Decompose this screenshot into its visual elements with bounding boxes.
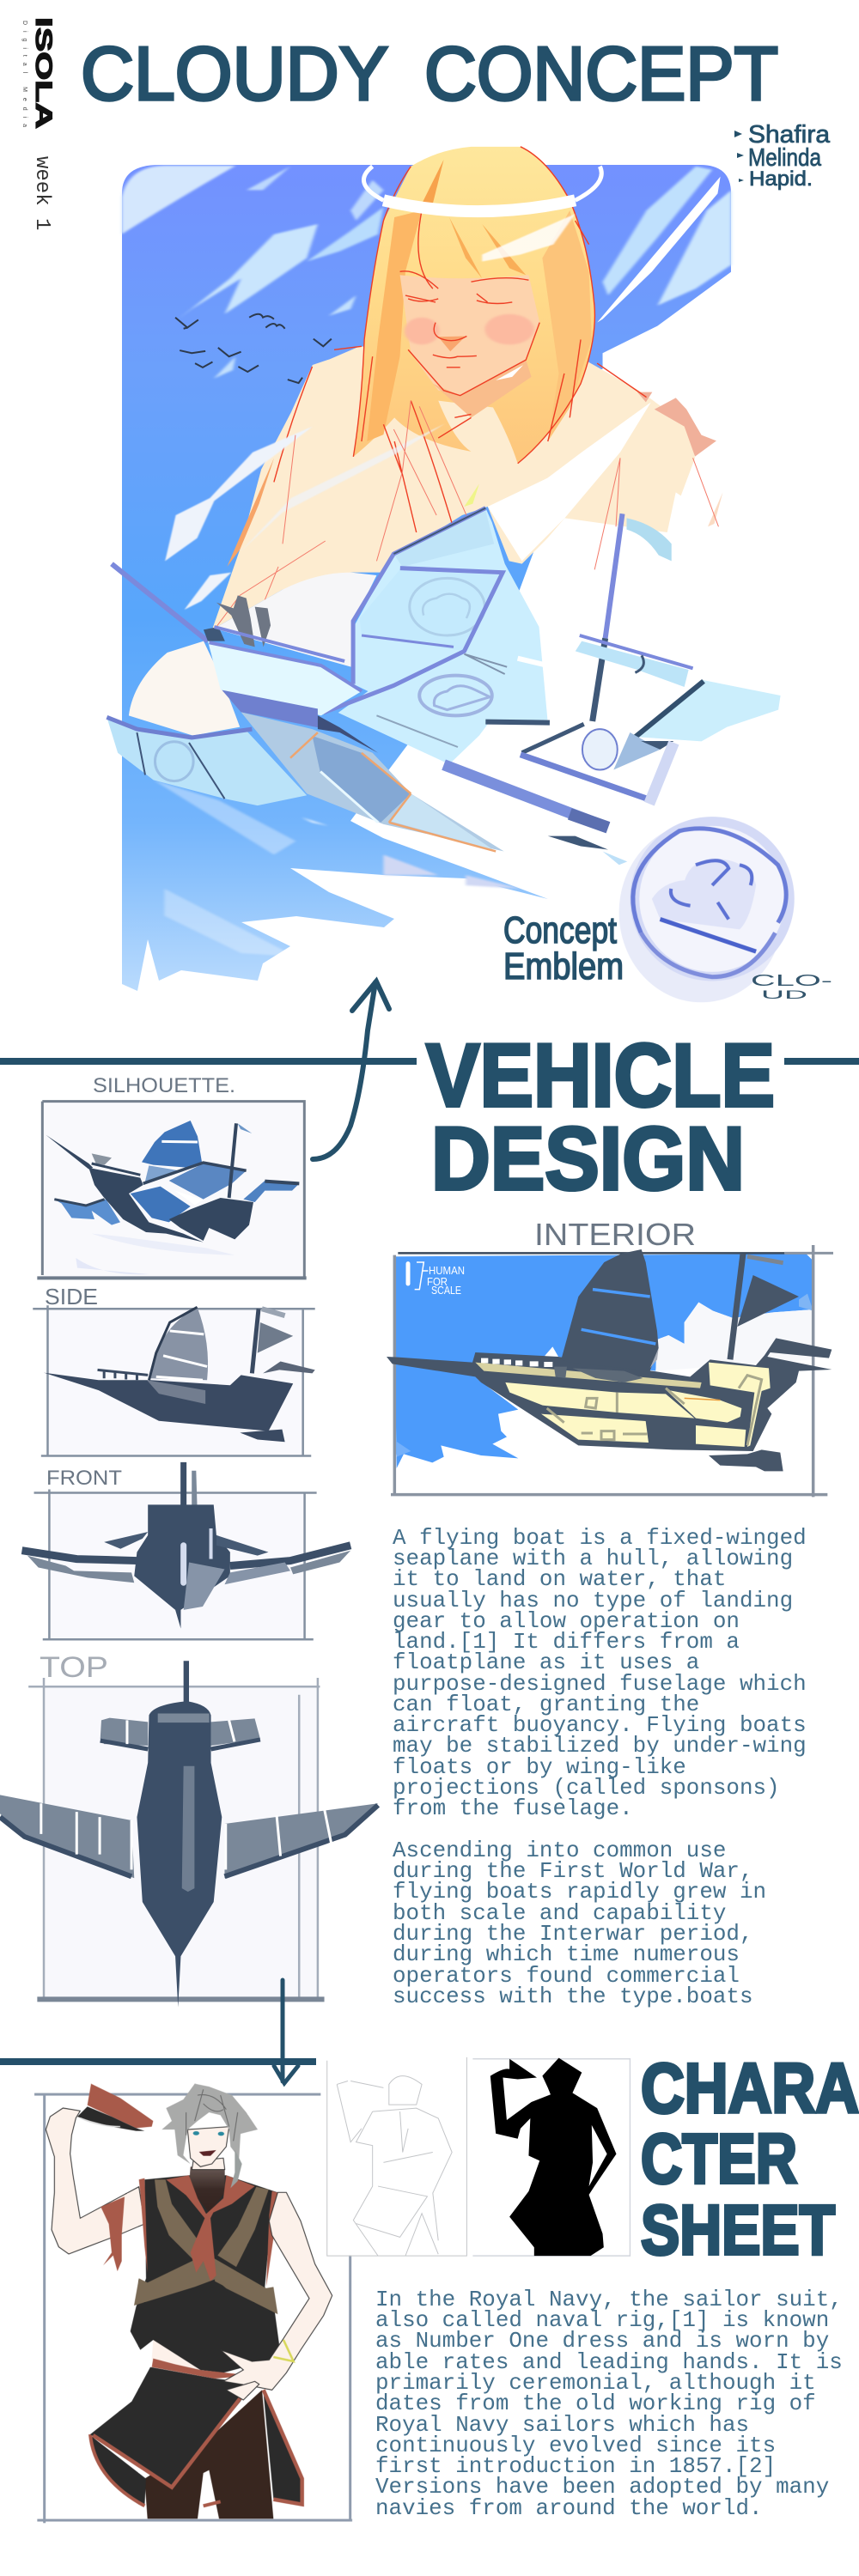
character: hand on hip arm (221, 2192, 332, 2390)
logo: ISOLA Digital Media (21, 17, 57, 129)
illustration: birds (175, 314, 332, 383)
interior: human for scale note: SCALE (431, 1284, 461, 1297)
illustration: sky white streaks (597, 177, 731, 407)
character: cap (88, 2084, 153, 2128)
text block: flying boat description: can float, granting the (393, 1692, 699, 1717)
text block: flying boat description: Ascending into common use (393, 1838, 726, 1863)
label: side: SIDE (45, 1284, 98, 1309)
text block: sailor suit description: In the Royal Navy, the sailor suit, (375, 2287, 843, 2312)
interior: human for scale note: FOR (427, 1275, 448, 1288)
section rule: vehicle design (0, 1058, 859, 1065)
panel: front view (22, 1462, 350, 1639)
girl: hair (353, 147, 594, 464)
panel: interior view (387, 1245, 833, 1497)
heading: vehicle design (426, 1026, 775, 1209)
text block: sailor suit description: dates from the old working rig of (375, 2391, 816, 2416)
white wind streaks (165, 423, 445, 610)
handwritten label: Concept Emblem: Emblem (503, 945, 624, 987)
week label: week 1 (30, 156, 53, 230)
panel: side view (33, 1305, 315, 1455)
panel: silhouette (37, 1102, 307, 1279)
ship: left wing (107, 717, 307, 805)
text block: sailor suit description: as Number One dress and is worn by (375, 2328, 829, 2354)
interior: cream compartments (505, 1382, 694, 1419)
character: neck and scarf (189, 2166, 225, 2213)
character: head (192, 2158, 225, 2170)
panel: character black silhouette (472, 2058, 630, 2256)
team names: Shafira (748, 121, 831, 149)
title: CONCEPT (424, 31, 778, 116)
text block: flying boat description: purpose-designed fuselage which (393, 1671, 807, 1697)
illustration: ocean waves (154, 780, 521, 957)
heading: character sheet: CTER (641, 2120, 797, 2198)
character: right flap (264, 2393, 302, 2505)
rear mast (606, 513, 623, 638)
ship: hull (222, 690, 318, 727)
interior: main sail (561, 1249, 659, 1371)
interior: deck rail (481, 1358, 552, 1367)
interior: human scale figure (408, 1262, 428, 1290)
text block: flying boat description: may be stabilized by under-wing (393, 1733, 807, 1759)
team names: Melinda (748, 144, 822, 172)
text block: flying boat description: operators found commercial (393, 1963, 740, 1989)
text block: flying boat description: during the Interwar period, (393, 1921, 752, 1947)
text block: sailor suit description: navies from around the world. (375, 2495, 763, 2521)
main sail (338, 508, 547, 764)
bowsprit (112, 564, 208, 641)
near-white glow behind ship (212, 573, 376, 667)
logo: ISOLA Digital Media: ISOLA (31, 17, 57, 129)
crew silhouettes (216, 595, 255, 647)
text block: sailor suit description: first introduction in 1857.[2] (375, 2453, 776, 2479)
character: belt (152, 2359, 252, 2379)
text block: flying boat description: gear to allow operation on (393, 1608, 740, 1634)
illustration: sky background (122, 165, 731, 991)
text block: flying boat description: seaplane with a hull, allowing (393, 1546, 793, 1571)
label: silhouette: SILHOUETTE. (93, 1074, 235, 1097)
title: CLOUDY (81, 31, 388, 116)
illustration: concept emblem coin (619, 817, 795, 1002)
text block: flying boat description: projections (called sponsons) (393, 1775, 780, 1801)
girl: face (400, 275, 539, 396)
silhouette: wings (54, 1200, 120, 1225)
logo: ISOLA Digital Media: Digital Media (21, 21, 27, 127)
text block: sailor suit description: able rates and leading hands. It is (375, 2349, 843, 2375)
text block: sailor suit description: Versions have been adopted by many (375, 2474, 829, 2500)
panel: character line sketch (327, 2057, 466, 2256)
text block: flying boat description: it to land on water, that (393, 1566, 726, 1592)
label: interior: INTERIOR (534, 1217, 696, 1252)
text block: flying boat description: aircraft buoyancy. Flying boats (393, 1712, 807, 1738)
arrow: vehicle to character (274, 1980, 298, 2083)
handwritten label: Concept Emblem: Concept (503, 909, 617, 951)
team names (734, 121, 831, 191)
text block: flying boat description: floatplane as it uses a (393, 1649, 699, 1675)
illustration: ship lower hull (107, 690, 673, 865)
interior: sky (393, 1254, 813, 1468)
small sail (576, 641, 689, 687)
character: torso (131, 2175, 279, 2372)
handwritten label: CLOUD: UD (761, 987, 807, 1001)
text block: flying boat description: from the fuselage. (393, 1795, 633, 1821)
interior: human for scale note: HUMAN (429, 1264, 465, 1277)
character: tights (144, 2390, 273, 2518)
character: apron (90, 2367, 252, 2486)
text block: sailor suit description: Royal Navy sailors which has (375, 2412, 749, 2438)
character: raised arm (46, 2108, 144, 2254)
illustration: ship sails and upper deck (112, 401, 781, 764)
team names: Hapid. (749, 167, 813, 191)
interior: rear mast and flag (730, 1254, 743, 1359)
text block: flying boat description: success with the type.boats (393, 1984, 752, 2009)
label: top: TOP (40, 1651, 108, 1684)
text block: flying boat description: land.[1] It differs from a (393, 1629, 740, 1655)
heading: vehicle design: DESIGN (431, 1109, 745, 1209)
text block: flying boat description: during which time numerous (393, 1941, 740, 1967)
interior: human for scale note (427, 1264, 465, 1297)
illustration: girl torso (212, 346, 722, 629)
character: back hem (90, 2434, 146, 2506)
handwritten label: Concept Emblem (503, 909, 624, 987)
handwritten label: CLOUD (751, 972, 832, 1001)
section rule: character sheet (0, 2058, 316, 2065)
text block: flying boat description (393, 1525, 807, 2009)
interior: cloud (655, 1303, 813, 1371)
text block: flying boat description: floats or by wing-like (393, 1754, 686, 1780)
text block: sailor suit description: also called naval rig,[1] is known (375, 2307, 829, 2333)
label: front: FRONT (46, 1467, 122, 1490)
text block: sailor suit description: primarily ceremonial, although it (375, 2370, 816, 2396)
text block: flying boat description: usually has no type of landing (393, 1588, 793, 1613)
text block: flying boat description: flying boats rapidly grew in (393, 1879, 766, 1905)
interior: hull (387, 1338, 832, 1451)
interior: rudder (709, 1449, 783, 1471)
text block: sailor suit description: continuously evolved since its (375, 2433, 776, 2458)
silhouette: sails (142, 1121, 202, 1168)
handwritten label: CLOUD: CLO- (751, 972, 832, 989)
panel: top view (0, 1661, 378, 2008)
heading: vehicle design: VEHICLE (426, 1026, 775, 1126)
arrow: vehicle to concept (313, 981, 389, 1159)
text block: flying boat description: both scale and capability (393, 1900, 726, 1926)
title (81, 31, 778, 116)
heading: character sheet (641, 2050, 859, 2269)
interior: frame (391, 1245, 827, 1497)
silhouette: hull (46, 1135, 93, 1170)
ship: deck (521, 755, 652, 800)
text block: flying boat description: during the First World War, (393, 1858, 752, 1884)
character: brown straps (155, 2179, 277, 2314)
girl: halo (363, 167, 601, 211)
text block: sailor suit description (375, 2287, 843, 2521)
rear wing sail (637, 680, 781, 741)
illustration: girl head (274, 147, 647, 532)
text block: flying boat description: A flying boat is a fixed-winged (393, 1525, 807, 1551)
illustration: clouds in sky (122, 166, 731, 379)
hull top deck (208, 641, 362, 715)
panel: character colour illustration (34, 2084, 352, 2523)
